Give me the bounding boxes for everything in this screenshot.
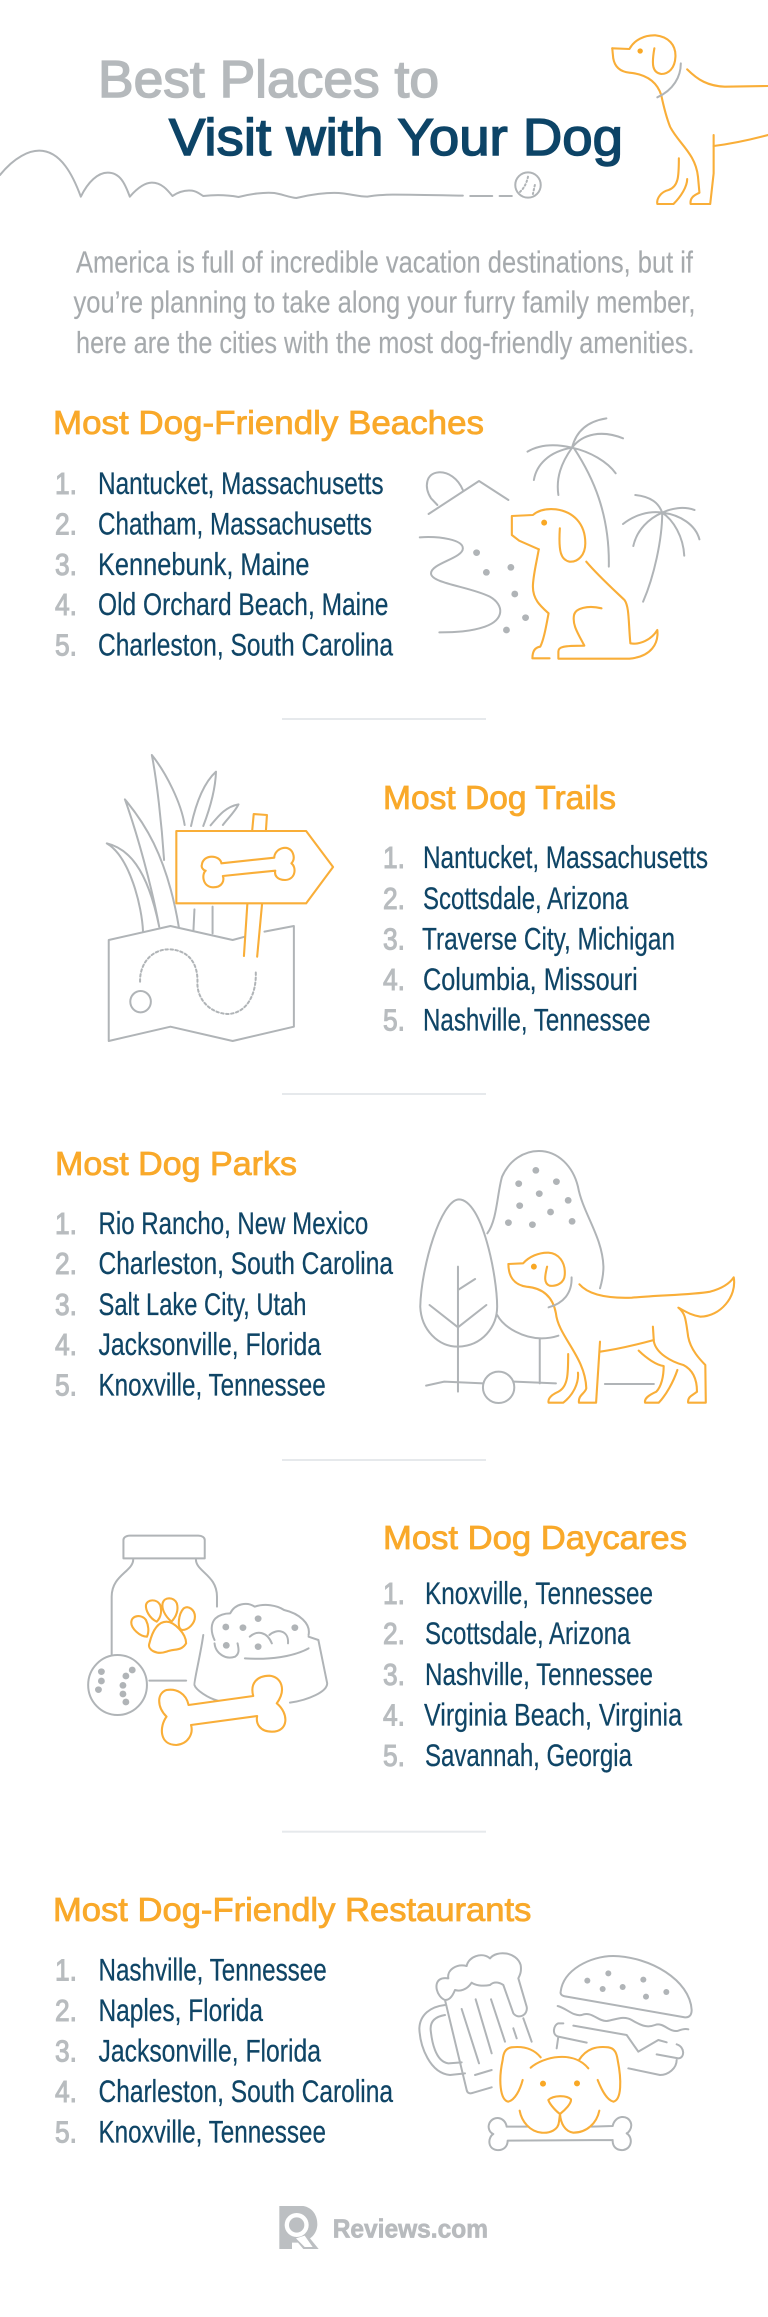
list: trails: 3. [383, 921, 405, 956]
icon: trail map and sign [107, 755, 333, 1041]
list: beaches [55, 465, 393, 663]
icon: header dog [612, 35, 768, 204]
icon: beer, burger and dog [419, 1953, 692, 2150]
list: parks: 4. [55, 1327, 77, 1362]
list: daycares: Scottsdale, Arizona [425, 1615, 631, 1651]
list: daycares: 4. [383, 1698, 405, 1733]
list: trails: 1. [383, 840, 405, 875]
list: parks: 2. [55, 1246, 77, 1281]
list: parks: Knoxville, Tennessee [98, 1367, 326, 1403]
list: parks: Charleston, South Carolina [98, 1245, 393, 1281]
list: restaurants: 5. [55, 2115, 77, 2150]
list: daycares: 5. [383, 1738, 405, 1773]
list: parks: Rio Rancho, New Mexico [98, 1205, 368, 1241]
panel: trails [107, 755, 708, 1041]
icon: jar, ball, bowl and bone [88, 1536, 327, 1745]
list: restaurants: 1. [55, 1953, 77, 1988]
list: daycares: 1. [383, 1576, 405, 1611]
list: parks: Salt Lake City, Utah [98, 1286, 306, 1322]
icon: bouncing ball line [0, 151, 541, 198]
list: trails: 5. [383, 1003, 405, 1038]
list: beaches: 3. [55, 547, 77, 582]
list: daycares: Knoxville, Tennessee [425, 1575, 653, 1611]
list: trails: 4. [383, 962, 405, 997]
panel: beaches [53, 404, 699, 663]
list: daycares: Virginia Beach, Virginia [424, 1697, 682, 1733]
logo: Reviews.com: Reviews.com [333, 2214, 488, 2244]
list: beaches: Kennebunk, Maine [98, 546, 310, 582]
heading: daycares: Most Dog Daycares [383, 1519, 687, 1556]
list: restaurants: 4. [55, 2074, 77, 2109]
list: parks: Jacksonville, Florida [98, 1326, 321, 1362]
list: beaches: 1. [55, 466, 77, 501]
icon: dog on beach [420, 418, 699, 659]
title: Best Places to [98, 51, 439, 109]
logo: Reviews.com [279, 2206, 488, 2249]
icon: dog in park [420, 1151, 734, 1403]
list: daycares: Nashville, Tennessee [425, 1656, 653, 1692]
list: daycares: Savannah, Georgia [425, 1737, 632, 1773]
list: beaches: Old Orchard Beach, Maine [98, 586, 388, 622]
list: parks [55, 1205, 393, 1403]
heading: beaches: Most Dog-Friendly Beaches [53, 404, 484, 441]
list: trails [383, 839, 708, 1038]
list: beaches: 2. [55, 506, 77, 541]
panel: restaurants [53, 1891, 692, 2150]
list: trails: 2. [383, 881, 405, 916]
list: restaurants: Jacksonville, Florida [98, 2033, 321, 2069]
heading: parks: Most Dog Parks [55, 1145, 297, 1182]
list: daycares: 2. [383, 1616, 405, 1651]
title [98, 51, 623, 167]
list: trails: Columbia, Missouri [423, 961, 638, 997]
list: parks: 3. [55, 1287, 77, 1322]
list: beaches: Chatham, Massachusetts [98, 505, 372, 541]
list: beaches: Charleston, South Carolina [98, 627, 393, 663]
list: restaurants: Charleston, South Carolina [98, 2073, 393, 2109]
list: restaurants [55, 1952, 393, 2150]
list: restaurants: 2. [55, 1993, 77, 2028]
panel: parks [55, 1145, 734, 1403]
panel: daycares [88, 1519, 687, 1773]
list: beaches: 4. [55, 587, 77, 622]
list: daycares [383, 1575, 682, 1773]
list: trails: Traverse City, Michigan [422, 920, 675, 956]
heading: trails: Most Dog Trails [383, 779, 616, 816]
list: restaurants: Nashville, Tennessee [98, 1952, 327, 1988]
list: restaurants: 3. [55, 2034, 77, 2069]
list: restaurants: Naples, Florida [98, 1992, 263, 2028]
list: trails: Scottsdale, Arizona [423, 880, 629, 916]
list: beaches: 5. [55, 628, 77, 663]
list: trails: Nashville, Tennessee [423, 1002, 650, 1038]
list: parks: 5. [55, 1368, 77, 1403]
list: daycares: 3. [383, 1657, 405, 1692]
title: Visit with Your Dog [169, 109, 623, 167]
list: beaches: Nantucket, Massachusetts [98, 465, 384, 501]
intro text [74, 245, 696, 360]
list: restaurants: Knoxville, Tennessee [98, 2114, 326, 2150]
heading: restaurants: Most Dog-Friendly Restaurants [53, 1891, 531, 1928]
list: parks: 1. [55, 1206, 77, 1241]
